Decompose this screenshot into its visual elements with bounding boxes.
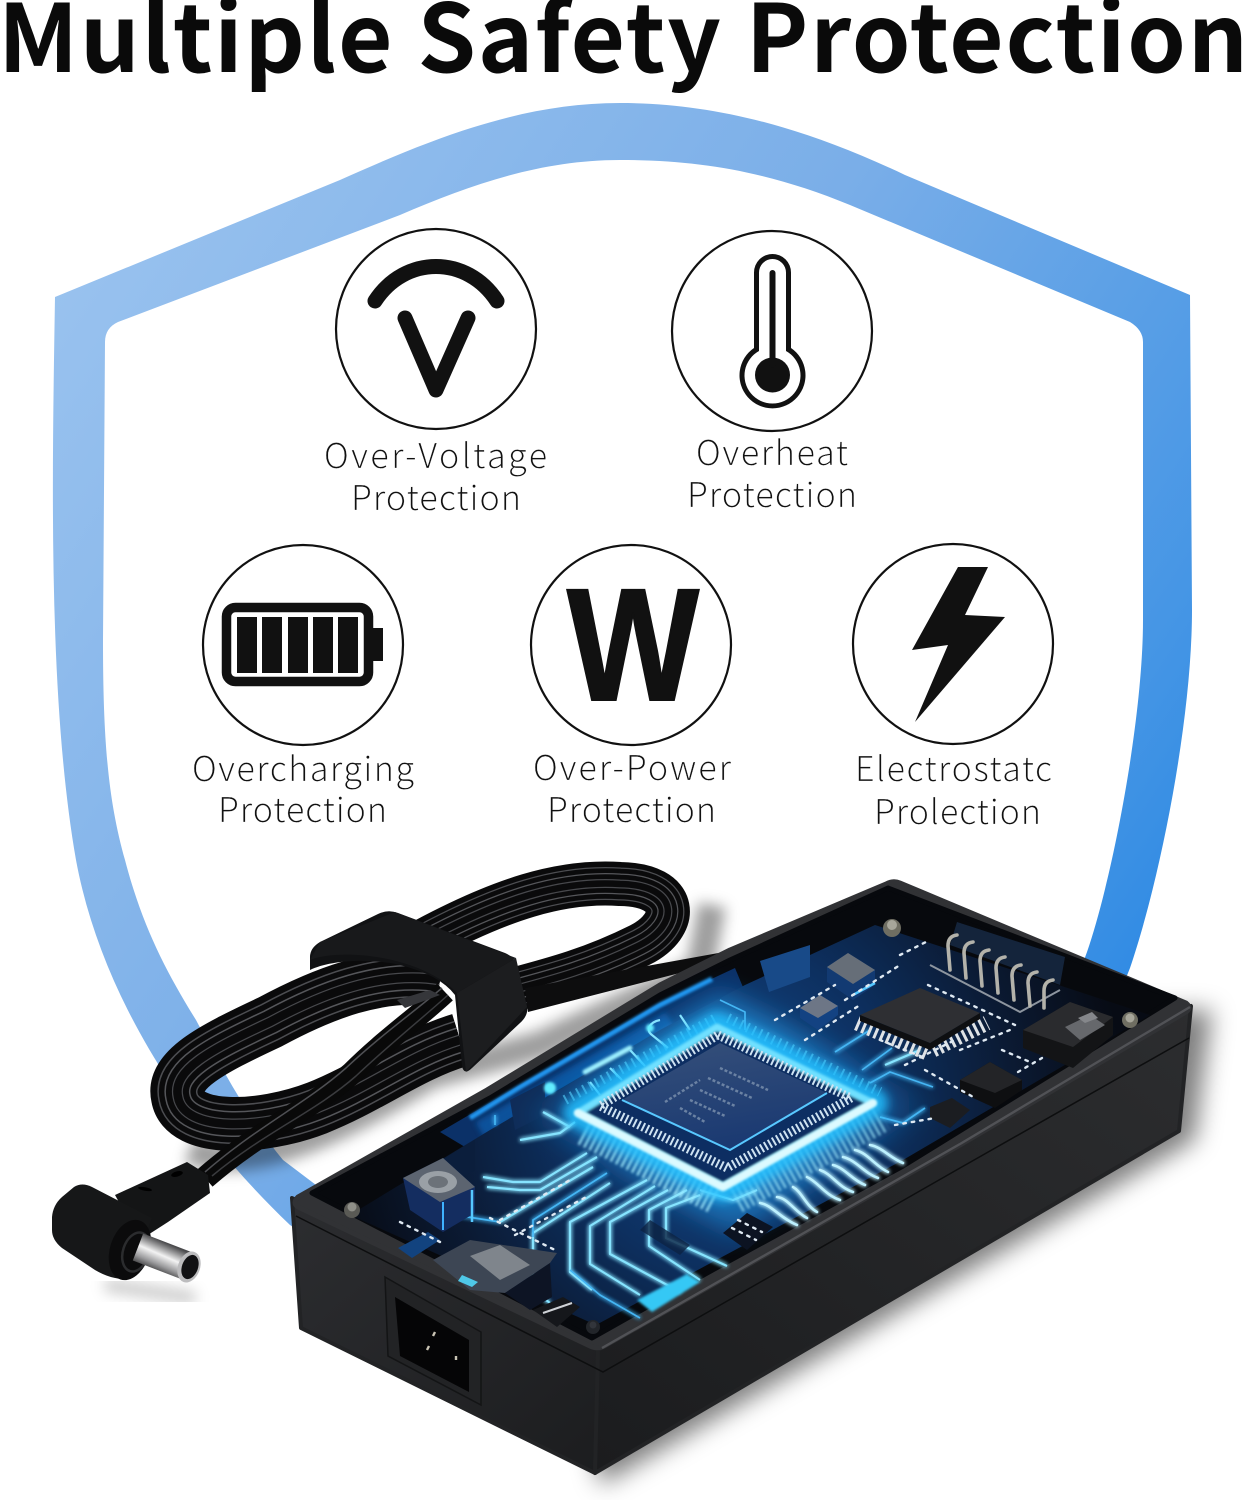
adapter left face (292, 1198, 598, 1473)
protection item: overcharging (192, 545, 414, 832)
inductor block (403, 1158, 475, 1232)
chip marking (665, 1068, 768, 1122)
metal barrel (138, 1247, 190, 1267)
rim highlight (602, 1007, 1190, 1348)
glowing inner wall (440, 968, 745, 1150)
small components (344, 919, 1138, 1334)
adapter shadow (590, 1010, 1212, 1485)
label: overheat protection: Overheat (696, 426, 848, 475)
upper cord loop (425, 883, 668, 992)
icon: lightning bolt (853, 544, 1053, 744)
protection item: over-voltage (324, 229, 547, 520)
cord to plug (205, 988, 448, 1178)
icon: watt letter W (531, 545, 731, 745)
chip face (622, 1043, 827, 1150)
protection item: overheat (672, 231, 872, 517)
outward pin fans (585, 1130, 715, 1198)
label: overcharging protection: Overcharging (192, 742, 414, 791)
scattered solder dots (500, 1180, 570, 1220)
label: over-power protection: Over-Power (533, 741, 732, 790)
bright bottom glow pads (637, 1274, 700, 1312)
label: over-power protection: Protection (547, 783, 716, 832)
icon: battery (203, 545, 403, 745)
mid seam lines (296, 1038, 1189, 1372)
glow ring (578, 1027, 873, 1187)
main chip (565, 1018, 882, 1198)
curved circuit traces right (700, 1030, 933, 1225)
label: over-voltage protection: Protection (351, 471, 521, 520)
label: over-power protection (533, 741, 732, 832)
open cavity (312, 888, 1175, 1338)
plug neck (115, 1162, 210, 1240)
cord shadow (190, 905, 712, 1157)
label: overcharging protection: Protection (218, 783, 387, 832)
small ICs near center (723, 1213, 773, 1250)
plug shadow (105, 1285, 195, 1298)
label: electrostatic protection: Prolection (874, 785, 1041, 834)
switch block (1023, 1002, 1113, 1068)
icon: thermometer (672, 231, 872, 431)
label: electrostatic protection: Electrostatc (855, 742, 1052, 791)
label: over-voltage protection: Over-Voltage (324, 429, 547, 478)
label: overheat protection: Protection (687, 468, 857, 517)
label: overheat protection (687, 426, 857, 517)
AC adapter (292, 882, 1212, 1485)
icon: watt letter W: W (567, 555, 699, 734)
lead to adapter (525, 950, 738, 1012)
adapter right face (595, 1006, 1191, 1473)
blue panels along wall (760, 945, 810, 992)
protection item: over-power (531, 545, 732, 832)
label: over-voltage protection (324, 429, 547, 520)
label: overcharging protection (192, 742, 414, 832)
chip halo (520, 990, 935, 1235)
lower cord loop (177, 978, 460, 1124)
traces above chip (544, 1000, 745, 1095)
right-angle plug (52, 1162, 210, 1286)
regulator block (433, 1240, 557, 1293)
adapter top rim (295, 882, 1189, 1348)
circuit board (344, 919, 1150, 1334)
power cord and plug (52, 883, 738, 1298)
secondary IC (857, 988, 987, 1053)
icon: voltage (336, 229, 536, 429)
pin header (928, 922, 1065, 1025)
protection item: electrostatic (853, 544, 1053, 834)
inner pins (600, 1035, 851, 1168)
label: electrostatic protection (855, 742, 1052, 834)
plug head (52, 1184, 152, 1279)
long circuit traces left (455, 1112, 727, 1318)
power inlet (385, 1277, 481, 1405)
cable strap (310, 911, 527, 1072)
